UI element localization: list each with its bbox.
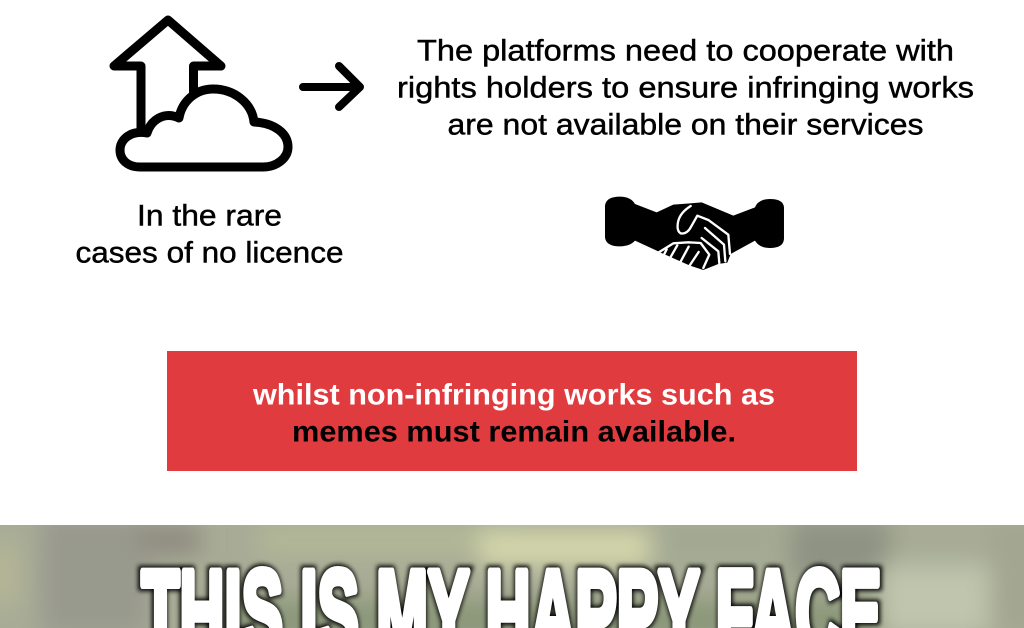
icon: upload arrow and cloud	[114, 20, 288, 167]
text: platforms need to cooperate	[397, 34, 974, 142]
text: platforms need to cooperate: rights holders to ensure infringing works	[397, 72, 974, 104]
arrow	[303, 66, 360, 107]
callout text: whilst non-infringing works such as	[252, 378, 775, 412]
text: rare cases of no licence	[76, 200, 344, 270]
meme photo	[0, 525, 1024, 628]
text: platforms need to cooperate: are not available on their services	[448, 108, 924, 142]
text: platforms need to cooperate: The platforms need to cooperate with	[417, 34, 954, 68]
text: rare cases of no licence: In the rare	[137, 200, 282, 232]
panel: red callout	[167, 351, 857, 471]
icon: handshake	[605, 197, 784, 270]
callout text: memes must remain available.	[292, 416, 736, 448]
text: rare cases of no licence: cases of no licence	[76, 236, 344, 270]
callout text	[252, 378, 775, 448]
